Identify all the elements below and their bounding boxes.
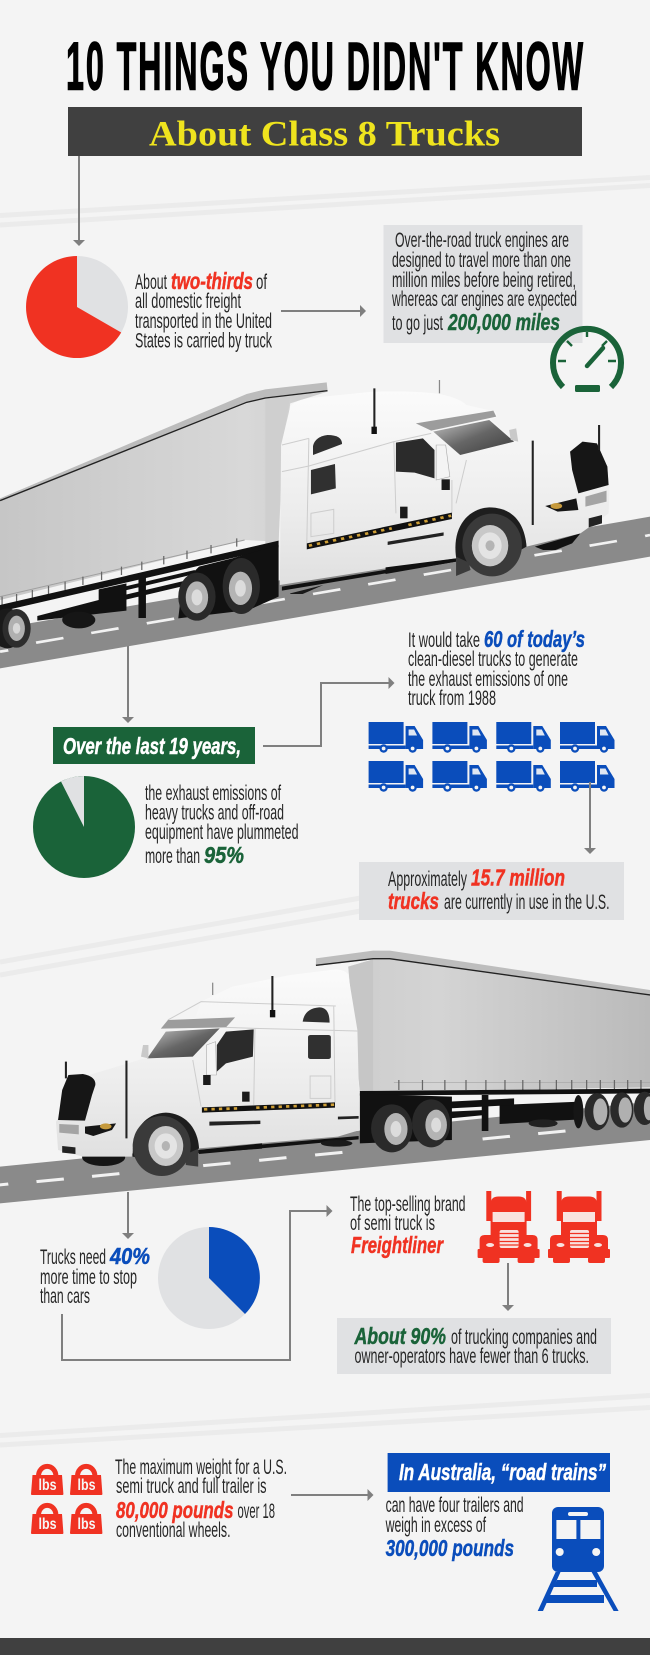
text: 60 of today's trucks: 60 of today’s (484, 626, 585, 652)
text: two-thirds of freight: transported in the United (135, 310, 272, 333)
text: four trailers: can have four trailers and (386, 1494, 524, 1517)
text: top-selling brand: of semi truck is (350, 1212, 435, 1235)
arrow: to engine panel (281, 305, 366, 317)
truck illustration: side view on road heading right (0, 380, 650, 668)
arrow: elbow to Freightliner text (62, 1205, 332, 1360)
text: exhaust emissions: more than (145, 845, 200, 868)
arrow: road to stopping text (122, 1192, 134, 1239)
panel: engine lifespan (384, 225, 582, 343)
trailer (316, 951, 650, 1131)
pie chart: 95 percent (33, 776, 135, 878)
text: two-thirds of freight: About (135, 271, 167, 294)
panel: engine lifespan: to go just (392, 312, 443, 335)
front wheel (455, 507, 527, 576)
panel: 15.7 million trucks: 15.7 million (471, 864, 565, 890)
panel: 15.7 million trucks: trucks (388, 888, 439, 914)
text: exhaust emissions (145, 782, 298, 868)
icons: eight blue trucks (369, 722, 614, 792)
text: four trailers: weigh in excess of (385, 1514, 486, 1537)
icons: two red semi trucks (478, 1191, 610, 1263)
text: maximum weight: 80,000 pounds (116, 1497, 234, 1523)
text: exhaust emissions: heavy trucks and off-road (145, 802, 284, 824)
label: In Australia road trains (388, 1453, 610, 1492)
arrow: banner to first pie (73, 156, 85, 246)
footer bar (0, 1638, 650, 1655)
text: two-thirds of freight: two-thirds (171, 268, 253, 294)
road (0, 1102, 650, 1203)
text: maximum weight: conventional wheels. (116, 1519, 230, 1542)
label: over the last 19 years: Over the last 19 years, (63, 733, 241, 759)
trailer (0, 382, 328, 621)
text: maximum weight: over 18 (238, 1500, 275, 1523)
text: trucks need 40 percent: Trucks need (40, 1246, 106, 1269)
text: exhaust emissions: 95% (204, 842, 244, 868)
trailer wheels (360, 1092, 650, 1152)
icons: four red weights (31, 1466, 102, 1534)
text: top-selling brand (350, 1193, 466, 1258)
front wheel (133, 1113, 199, 1176)
arrow: to road trains (291, 1489, 374, 1501)
text: exhaust emissions: the exhaust emissions of (145, 782, 281, 805)
panel: 90 percent of companies (337, 1318, 611, 1374)
tractor cab (280, 380, 609, 594)
trailer wheels (0, 545, 279, 648)
pie chart: 40 percent (158, 1227, 260, 1329)
text: top-selling brand: Freightliner (351, 1232, 444, 1258)
truck illustration: side view on road heading left (0, 951, 650, 1203)
subtitle banner: About Class 8 Trucks (149, 114, 500, 154)
icon: speedometer (553, 329, 621, 392)
text: trucks need 40 percent: more time to stop (40, 1266, 137, 1289)
subtitle banner (68, 107, 582, 156)
text: trucks need 40 percent (40, 1243, 150, 1308)
panel: 15.7 million trucks: Approximately (388, 868, 467, 891)
icon: train on tracks (538, 1507, 619, 1611)
arrow: elbow to clean diesel text (263, 677, 394, 746)
text: two-thirds of freight: States is carried by truck (135, 330, 272, 352)
text: four trailers: 300,000 pounds (386, 1535, 514, 1561)
text: 60 of today's trucks (408, 626, 585, 710)
text: top-selling brand: The top-selling brand (350, 1193, 466, 1216)
label: over the last 19 years (53, 727, 255, 764)
text: trucks need 40 percent: 40% (109, 1243, 150, 1269)
panel: engine lifespan: 200,000 miles (447, 309, 560, 335)
text: maximum weight: The maximum weight for a U.S. (115, 1456, 287, 1479)
panel: 15.7 million trucks (359, 862, 624, 920)
arrow: trucks to 15.7 million panel (584, 782, 596, 854)
text: maximum weight (115, 1456, 287, 1542)
text: two-thirds of freight: all domestic freight (135, 290, 241, 313)
arrow: trucks to 90 percent panel (502, 1263, 514, 1311)
road (0, 517, 650, 668)
text: 60 of today's trucks: truck from 1988 (408, 687, 496, 710)
text: 60 of today's trucks: It would take (408, 629, 480, 652)
text: trucks need 40 percent: than cars (40, 1285, 90, 1308)
text: maximum weight: semi truck and full trailer is (116, 1475, 266, 1498)
text: two-thirds of freight: of (256, 271, 267, 294)
text: two-thirds of freight (135, 268, 272, 352)
panel: 90 percent of companies: About 90% (354, 1323, 446, 1349)
arrow: road to green label (122, 646, 134, 723)
text: exhaust emissions: equipment have plummeted (145, 821, 298, 844)
text: four trailers (385, 1494, 524, 1561)
pie chart: two-thirds (26, 256, 128, 358)
tractor cab (56, 969, 360, 1167)
